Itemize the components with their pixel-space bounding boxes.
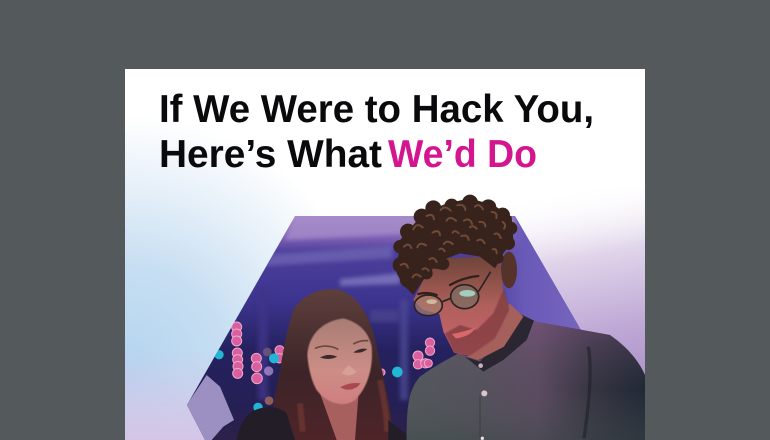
title xyxy=(159,88,594,176)
background ceiling bands xyxy=(258,216,515,400)
bokeh lights xyxy=(214,322,435,412)
title: Here’s What xyxy=(159,133,382,176)
woman face xyxy=(307,318,372,404)
person at left edge xyxy=(187,375,234,440)
woman eyes and mouth xyxy=(315,341,368,390)
page margin right xyxy=(645,0,770,440)
man shirt xyxy=(407,314,645,440)
hexagon photo: office background and woman xyxy=(187,216,580,440)
man hair curls xyxy=(401,205,505,277)
woman neck xyxy=(320,393,358,440)
man shirt placket and buttons xyxy=(465,314,590,440)
man beard xyxy=(445,288,509,356)
woman hair xyxy=(273,289,393,440)
man hair xyxy=(393,195,517,295)
woman xyxy=(237,289,413,440)
woman sweater xyxy=(237,407,413,440)
man glasses xyxy=(414,272,491,316)
man xyxy=(393,195,645,440)
title: We’d Do xyxy=(388,133,537,176)
title: If We Were to Hack You, xyxy=(159,88,594,131)
woman hair highlights xyxy=(300,380,387,432)
man ear xyxy=(501,252,517,288)
man mouth xyxy=(452,327,476,338)
infographic canvas xyxy=(125,69,645,440)
panel: white card with gradient wash xyxy=(125,69,645,440)
man neck xyxy=(467,303,523,360)
man face xyxy=(413,257,509,356)
man eyebrows and nose xyxy=(418,276,478,295)
